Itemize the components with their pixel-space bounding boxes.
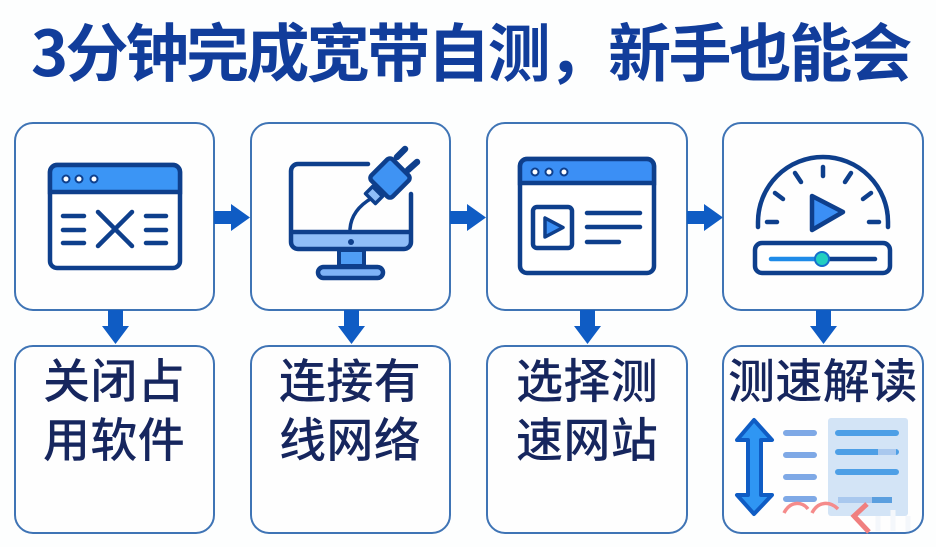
icon: vertical double arrow (737, 420, 772, 514)
arrow: step 2 down (338, 310, 365, 344)
panel: step 1 label (15, 346, 214, 533)
panel: step 3 label (487, 346, 687, 533)
watermark (784, 503, 908, 532)
text: step 2: 连接有 (279, 355, 421, 408)
arrow: step 3 to 4 (687, 204, 723, 231)
text: step 1: 用软件 (43, 414, 185, 467)
panel: step 2 label (251, 346, 450, 533)
arrow: step 3 down (574, 310, 601, 344)
icon: speed gauge with slider (755, 157, 890, 273)
text: step 4: 测速解读 (728, 355, 918, 408)
results card (828, 418, 908, 516)
arrow: step 4 down (810, 310, 837, 344)
text: step 2: 线网络 (279, 414, 421, 467)
icon: monitor with plug (291, 149, 417, 278)
panel: step 1 icon (15, 123, 214, 310)
icon: browser with video (520, 159, 654, 273)
text: step 3: 速网站 (516, 414, 658, 467)
text: step 1: 关闭占 (43, 355, 185, 408)
title: 3分钟完成宽带自测，新手也能会 (31, 4, 911, 95)
panel: step 4 icon (723, 123, 923, 310)
arrow: step 1 to 2 (214, 204, 250, 231)
panel: step 4 label (723, 346, 923, 533)
arrow: step 2 to 3 (450, 204, 486, 231)
panel: step 2 icon (251, 123, 450, 310)
text: step 3: 选择测 (516, 355, 658, 408)
arrow: step 1 down (102, 310, 129, 344)
list lines (786, 433, 814, 499)
panel: step 3 icon (487, 123, 687, 310)
icon: window with close mark (50, 165, 180, 268)
